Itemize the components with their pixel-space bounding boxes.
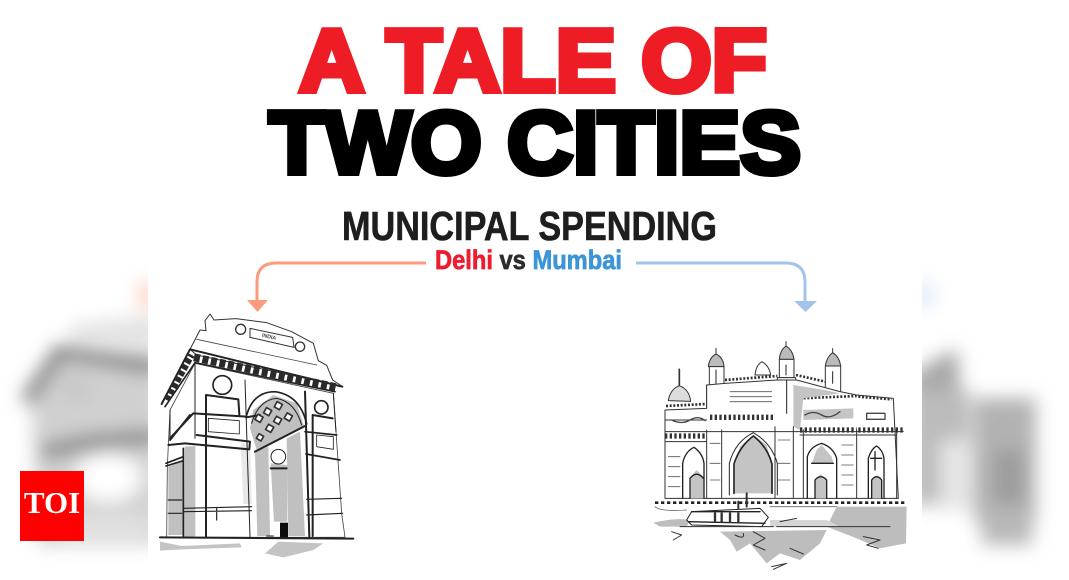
subtitle: Delhi vs Mumbai: Delhi vs Mumbai <box>435 245 622 275</box>
grey shaded piers <box>168 395 305 537</box>
subtitle: municipal spending: MUNICIPAL SPENDING <box>342 203 717 249</box>
roof balustrades <box>666 375 892 406</box>
logo: TOI <box>20 471 84 541</box>
dark structural lines <box>160 363 353 539</box>
attic block <box>190 314 342 386</box>
illustration: India Gate <box>160 314 353 557</box>
towers and domes <box>668 342 841 411</box>
arch and coffers <box>246 392 307 468</box>
arches and details <box>665 365 905 498</box>
doorway <box>280 523 288 539</box>
title line 1: A TALE OF: A TALE OF <box>299 11 767 110</box>
main facade <box>665 380 898 498</box>
water ripples <box>672 518 890 569</box>
logo: TOI: TOI <box>24 485 80 520</box>
arrow: to Mumbai <box>636 263 817 312</box>
blurred background strip: left <box>26 282 160 545</box>
title <box>269 11 801 192</box>
arrow: to Delhi <box>247 263 426 312</box>
quay <box>655 503 907 510</box>
shaded walls <box>690 385 882 498</box>
cornice with dentils <box>162 349 342 407</box>
ferry boat <box>687 493 768 527</box>
blurred background strip: right <box>910 282 1036 545</box>
illustration: Gateway of India <box>653 342 907 569</box>
inscription plate <box>197 324 317 365</box>
ground shadows <box>160 542 323 557</box>
title line 2: TWO CITIES: TWO CITIES <box>269 93 801 192</box>
water shadows <box>653 507 907 563</box>
building body <box>167 363 345 537</box>
inscription plate: INDIA <box>261 333 277 342</box>
